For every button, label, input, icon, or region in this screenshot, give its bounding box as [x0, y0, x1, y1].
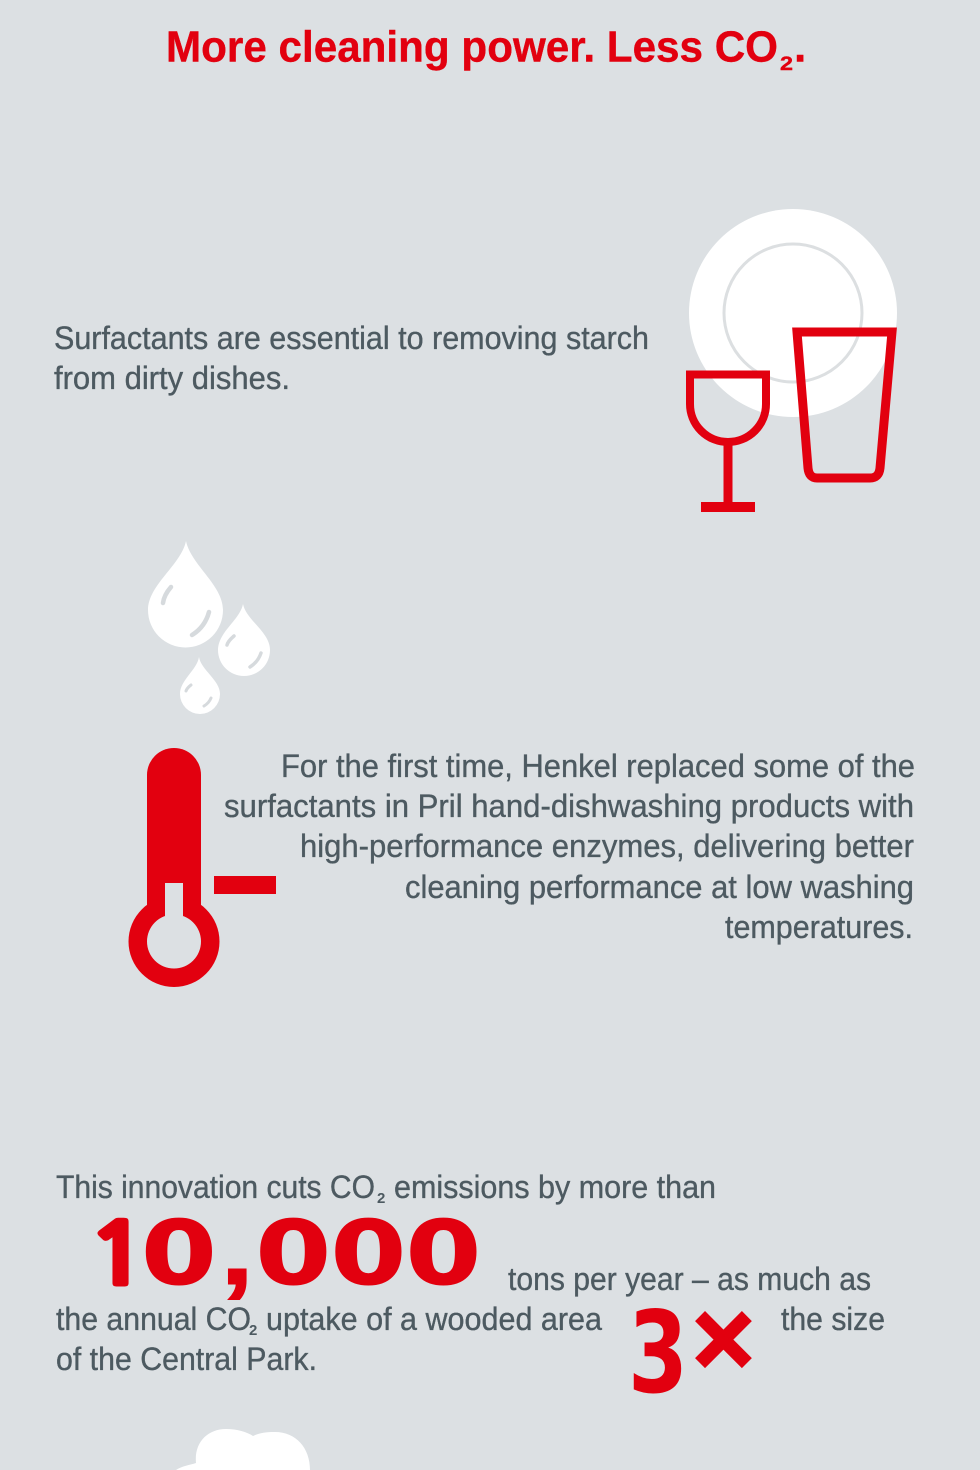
- icon: thermometer: [128, 748, 276, 987]
- big number: 10,000: 0: [141, 1203, 217, 1305]
- big number: 3x: ×: [687, 1286, 760, 1388]
- big number: 10,000: ,: [220, 1194, 254, 1305]
- text block: CO2 savings: emissions by more than: [394, 1169, 716, 1205]
- medium drop: [218, 604, 270, 676]
- big number: 3x: [628, 1286, 760, 1419]
- large drop: [148, 541, 223, 648]
- icon: water drops: [148, 541, 270, 714]
- text block: CO2 savings: the size: [781, 1301, 885, 1337]
- icon: plate: [689, 209, 897, 417]
- text block: CO2 savings: This innovation cuts CO: [56, 1169, 375, 1205]
- text block: surfactants: from dirty dishes.: [54, 360, 290, 396]
- text block: CO2 savings: uptake of a wooded area: [266, 1301, 602, 1337]
- title: 2: [780, 54, 793, 75]
- text block: CO2 savings: [56, 1169, 885, 1377]
- text block: CO2 savings: 2: [377, 1190, 385, 1207]
- icon: wine glass: [690, 374, 766, 507]
- icon: tumbler: [797, 332, 892, 478]
- text block: enzymes: cleaning performance at low washing: [405, 869, 914, 905]
- icon: cloud, cropped at the bottom edge: [176, 1429, 310, 1470]
- text block: enzymes: For the first time, Henkel replaced some of the: [281, 748, 915, 784]
- title: .: [794, 22, 806, 72]
- big number: 10,000: 0: [256, 1203, 331, 1305]
- title: More cleaning power. Less CO: [166, 22, 778, 72]
- big number: 10,000: 0: [331, 1203, 406, 1305]
- small drop: [180, 657, 220, 714]
- text block: CO2 savings: of the Central Park.: [56, 1341, 317, 1377]
- text block: CO2 savings: tons per year – as much as: [508, 1261, 871, 1297]
- big number: 10,000: 0: [406, 1203, 481, 1305]
- text block: enzymes: high-performance enzymes, delivering better: [300, 828, 914, 864]
- text block: enzymes: surfactants in Pril hand-dishwashing products with: [224, 788, 914, 824]
- icon: plate and glasses: [689, 209, 897, 507]
- text block: enzymes: temperatures.: [725, 909, 913, 945]
- text block: CO2 savings: 2: [249, 1322, 257, 1339]
- big number: 3x: 3: [628, 1287, 688, 1419]
- big number: 10,000: 1: [87, 1214, 150, 1297]
- text block: surfactants: Surfactants are essential to removing starch: [54, 320, 649, 356]
- text block: enzymes: [224, 748, 915, 945]
- text block: surfactants: [54, 320, 649, 396]
- text block: CO2 savings: the annual CO: [56, 1301, 251, 1337]
